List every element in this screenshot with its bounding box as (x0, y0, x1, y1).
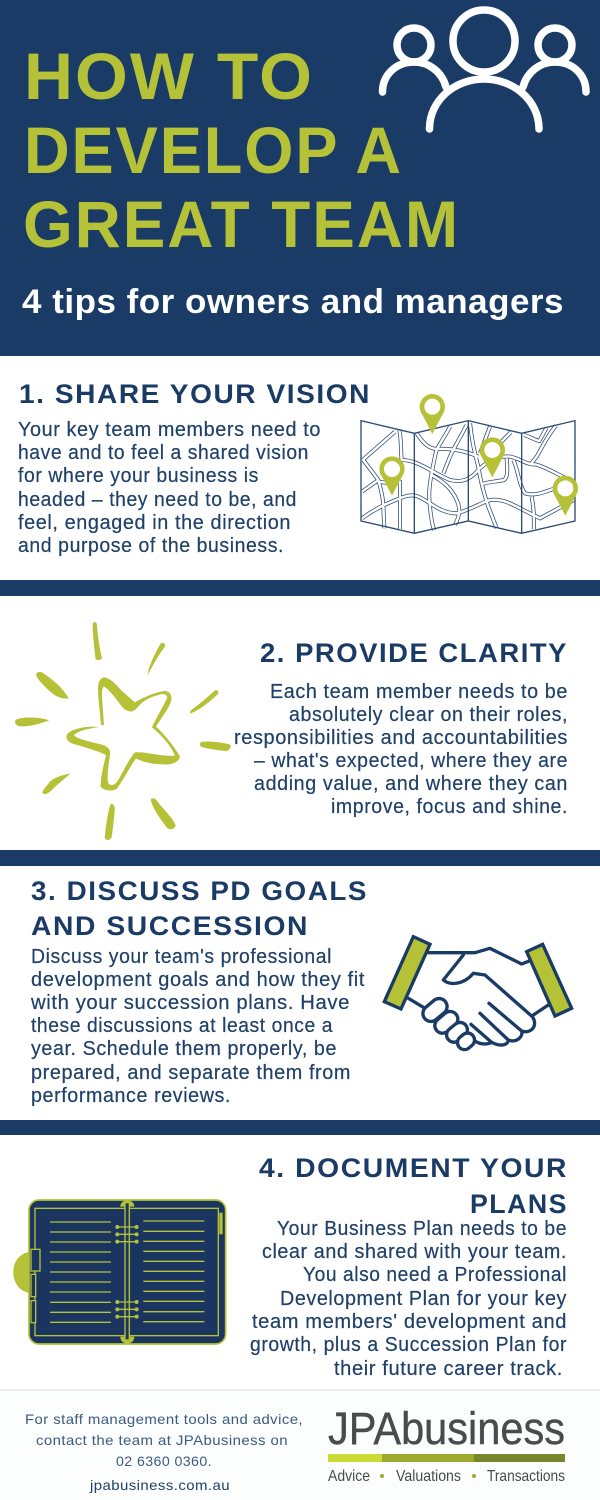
heading: tip 4: PLANS (470, 1189, 568, 1219)
panel: tip 1 share your vision (18, 379, 578, 557)
logo: JPAbusiness: JPAbusiness (328, 1403, 565, 1454)
title: HOW TO (24, 39, 314, 113)
text: tip 1 body: headed – they need to be, and (18, 489, 297, 511)
text: tip 4 body: You also need a Professional (303, 1264, 567, 1286)
text: tip 4 body: Your Business Plan needs to be (277, 1218, 567, 1240)
text: tip 2 body: – what's expected, where they are (254, 750, 568, 772)
text: tip 1 body: Your key team members need to (18, 419, 321, 441)
panel: tip 4 document your plans (13, 1153, 568, 1380)
logo: JPAbusiness (328, 1403, 565, 1485)
heading: tip 1: 1. SHARE YOUR VISION (19, 379, 371, 409)
text: tip 2 body: absolutely clear on their roles, (289, 704, 568, 726)
text: tip 1 body: have and to feel a shared vision (18, 442, 309, 464)
text: contact call to action: jpabusiness.com.au (89, 1477, 230, 1493)
heading: tip 3 (31, 876, 368, 941)
panel: footer (0, 1389, 600, 1500)
text: tip 3 body: year. Schedule them properly, be (31, 1038, 337, 1060)
heading: tip 4 (259, 1153, 568, 1219)
icon: folded map with pins (361, 394, 578, 533)
title (23, 39, 460, 261)
heading: tip 3: AND SUCCESSION (31, 911, 309, 941)
heading: tip 2: 2. PROVIDE CLARITY (260, 638, 568, 668)
icon: hand-drawn star with rays (15, 622, 231, 840)
text: tip 2 body: improve, focus and shine. (331, 796, 568, 818)
text: tip 3 body: with your succession plans. Have (30, 992, 350, 1014)
text: tip 1 body: feel, engaged in the direction (18, 512, 291, 534)
panel: header (0, 0, 600, 356)
icon: team of people (382, 10, 586, 129)
icon: open planner notebook (13, 1200, 226, 1344)
panel: tip 2 provide clarity (15, 622, 568, 840)
title: DEVELOP A (24, 113, 403, 187)
text: tip 2 body (234, 681, 568, 818)
heading: tip 3: 3. DISCUSS PD GOALS (31, 876, 368, 906)
subtitle: 4 tips for owners and managers (22, 283, 564, 321)
text: tip 4 body: their future career track. (334, 1358, 563, 1380)
text: tip 3 body: prepared, and separate them from (31, 1062, 351, 1084)
text: tip 1 body: and purpose of the business. (18, 535, 284, 557)
text: tip 1 body (18, 419, 321, 557)
text: contact call to action (25, 1411, 303, 1493)
text: tip 2 body: responsibilities and accountabilities (234, 727, 568, 749)
text: tip 4 body: growth, plus a Succession Plan for (250, 1334, 567, 1356)
panel: tip 3 discuss PD goals (30, 876, 572, 1107)
text: tip 3 body: performance reviews. (31, 1085, 231, 1107)
text: tip 1 body: for where your business is (18, 465, 259, 487)
heading: tip 4: 4. DOCUMENT YOUR (259, 1153, 568, 1183)
text: tip 3 body (30, 946, 365, 1107)
text: tip 4 body: clear and shared with your team. (262, 1241, 567, 1263)
logo: JPAbusiness: Valuations (396, 1468, 461, 1485)
title: GREAT TEAM (23, 187, 460, 261)
text: contact call to action: contact the team at JPAbusiness on (36, 1432, 288, 1448)
text: tip 4 body: team members' development and (252, 1311, 567, 1333)
logo: JPAbusiness: Transactions (487, 1468, 565, 1485)
text: tip 3 body: Discuss your team's professional (31, 946, 332, 968)
text: contact call to action: For staff management tools and advice, (25, 1411, 303, 1427)
text: contact call to action: 02 6360 0360. (116, 1453, 212, 1469)
text: tip 3 body: these discussions at least once a (31, 1015, 333, 1037)
text: tip 4 body (250, 1218, 567, 1380)
text: tip 4 body: Development Plan for your key (280, 1288, 567, 1310)
text: tip 3 body: development goals and how they fit (31, 969, 365, 991)
text: tip 2 body: adding value, and where they can (254, 773, 568, 795)
icon: handshake (384, 937, 572, 1052)
text: tip 2 body: Each team member needs to be (270, 681, 568, 703)
logo: JPAbusiness: Advice (328, 1468, 370, 1485)
